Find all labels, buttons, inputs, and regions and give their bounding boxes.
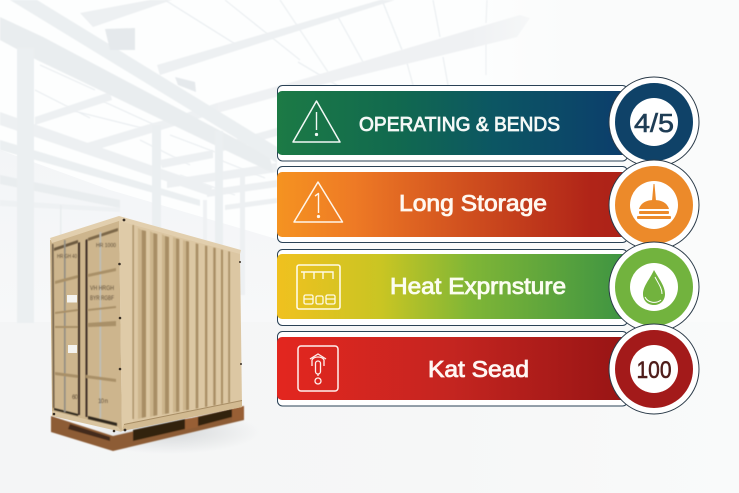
container side face: [119, 217, 242, 431]
door markings: [57, 243, 116, 405]
back wall: [0, 150, 280, 325]
panel: long storage: [277, 160, 699, 250]
door markings: 10 n: [98, 399, 108, 405]
door frame and seams: [52, 228, 118, 426]
badge: 100: 100: [636, 357, 672, 384]
corner bolts: [53, 219, 242, 432]
bar: kat sead: [277, 337, 627, 400]
door labels: [67, 295, 77, 302]
side corrugation: [132, 225, 230, 419]
icon: gauge tag: [298, 346, 338, 391]
door ribs: [55, 268, 116, 382]
heading: long storage: Long Storage: [399, 190, 547, 216]
door markings: BYR RGBF: [90, 296, 114, 302]
container front face: [50, 218, 122, 431]
skylight mullions: [35, 0, 487, 195]
badge: water drop icon: [609, 242, 699, 332]
badge: storage dome icon: [609, 160, 699, 250]
container on pallet: [50, 216, 260, 454]
roof steel structure: [0, 0, 530, 323]
icon: warning triangle: [293, 101, 340, 142]
columns: [17, 48, 34, 323]
door rods: [64, 240, 66, 412]
badge: 100: [609, 324, 699, 414]
lower front rail: [52, 411, 122, 432]
heading: kat sead: Kat Sead: [428, 356, 529, 382]
bar: heat exposure: [277, 254, 627, 319]
door markings: HR 1000: [96, 243, 116, 249]
top edge: [50, 216, 241, 254]
heading: heat exposure: Heat Exprnsture: [390, 273, 566, 299]
door markings: 60: [72, 395, 79, 401]
badge: 4/5: [609, 77, 699, 167]
panel: kat sead: [277, 324, 699, 414]
corner post: [119, 218, 133, 431]
panel: heat exposure: [277, 242, 699, 332]
icon: equipment panel: [297, 265, 340, 309]
panel: operating and bends: [277, 77, 699, 167]
door markings: VH HRGH: [90, 286, 114, 292]
floor shadow: [80, 410, 260, 454]
right fade: [470, 0, 570, 90]
heading: operating and bends: OPERATING & BENDS: [359, 114, 560, 136]
down-right beams: [0, 112, 213, 195]
icon: warning triangle: [294, 182, 342, 222]
bottom rail: [122, 400, 242, 431]
badge: 4/5: 4/5: [634, 108, 674, 138]
ceiling: [0, 0, 560, 240]
bar: long storage: [277, 172, 627, 237]
up-right beams: [217, 15, 530, 113]
wooden pallet: [51, 406, 244, 451]
floor: [0, 322, 739, 493]
bar: operating and bends: [277, 91, 627, 155]
door markings: HR GH 40: [57, 254, 77, 260]
